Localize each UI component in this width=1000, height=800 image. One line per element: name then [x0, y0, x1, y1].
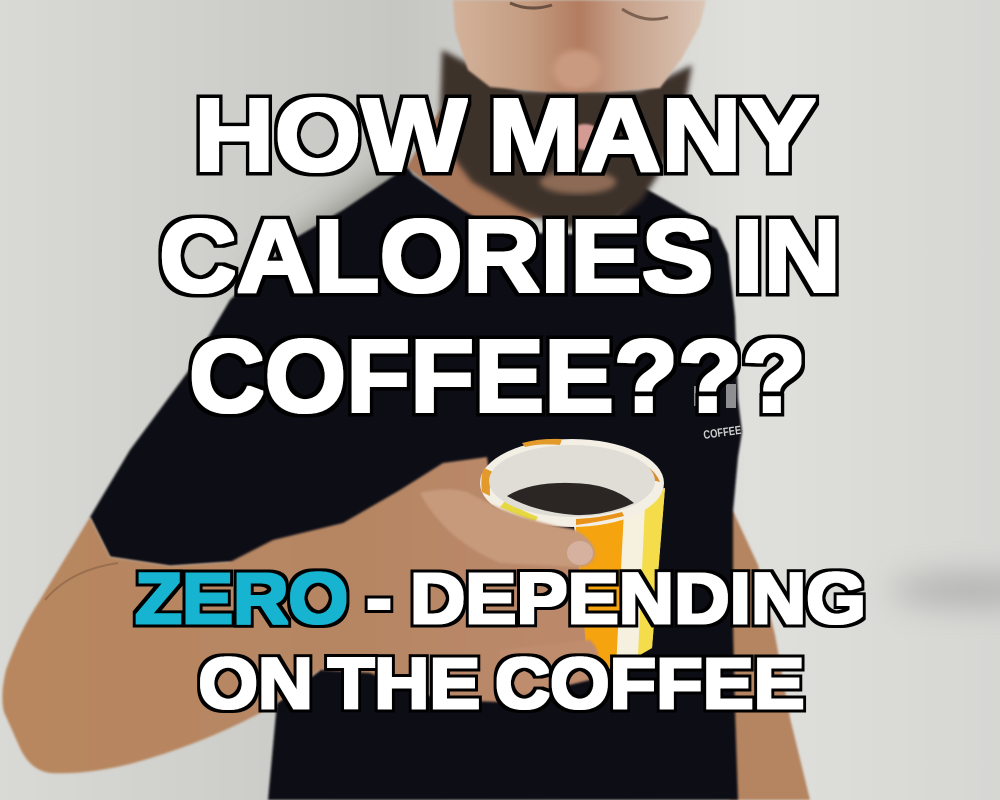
t-shirt [90, 167, 742, 800]
headline line 2: CALORIES IN [159, 198, 841, 314]
rim orange mark left [481, 468, 493, 496]
wall shadow right [890, 576, 1000, 604]
cup interior [489, 445, 655, 517]
chin patch [540, 170, 616, 194]
elbow crease [45, 563, 118, 600]
beard [440, 50, 692, 228]
cup body [572, 488, 665, 670]
rim orange mark top [522, 439, 562, 447]
neck [407, 110, 650, 225]
headline line 3: COFFEE??? [189, 318, 806, 434]
chest logo mark right [726, 384, 736, 408]
rim yellow mark [500, 501, 538, 522]
answer text [135, 560, 866, 724]
coffee cup [480, 439, 665, 670]
orange stripe [575, 510, 624, 670]
yellow stripe [638, 488, 665, 656]
chest logo text: COFFEE [702, 423, 742, 442]
rim orange mark right [640, 463, 660, 482]
left arm and hand [2, 457, 600, 773]
headline line 1: HOW MANY [194, 78, 816, 192]
lower fingers [500, 640, 599, 692]
headline [159, 78, 841, 434]
thumbnail [567, 541, 593, 565]
coffee [507, 483, 634, 515]
eye left [510, 3, 552, 8]
nose tip [553, 50, 601, 90]
chest logo mark left [694, 386, 703, 406]
rim orange front [576, 512, 624, 525]
face [453, 0, 706, 92]
shoulder shadow on wall [235, 160, 440, 300]
right arm [725, 511, 810, 800]
lips [568, 124, 602, 150]
eye right [622, 9, 668, 19]
thumb [420, 489, 595, 567]
answer line 2: ON THE COFFEE [198, 645, 804, 724]
answer line 1: ZERO - DEPENDING [135, 560, 866, 639]
cup rim [480, 439, 664, 527]
